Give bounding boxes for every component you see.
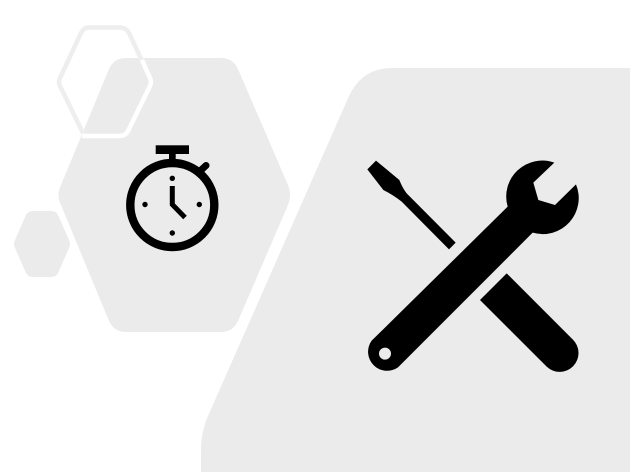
screwdriver blade and shaft xyxy=(367,161,456,249)
wrench xyxy=(368,161,579,371)
panel: small hexagon xyxy=(14,211,70,277)
screwdriver handle xyxy=(480,273,579,372)
panel: large tools panel xyxy=(201,68,630,472)
panel: large hexagon xyxy=(58,58,290,332)
icon: stopwatch xyxy=(130,145,214,247)
icon: crossed wrench and screwdriver xyxy=(367,161,579,372)
outline hexagon, white segment over large hexagon xyxy=(82,60,151,136)
outline hexagon, grey segment xyxy=(59,28,151,136)
